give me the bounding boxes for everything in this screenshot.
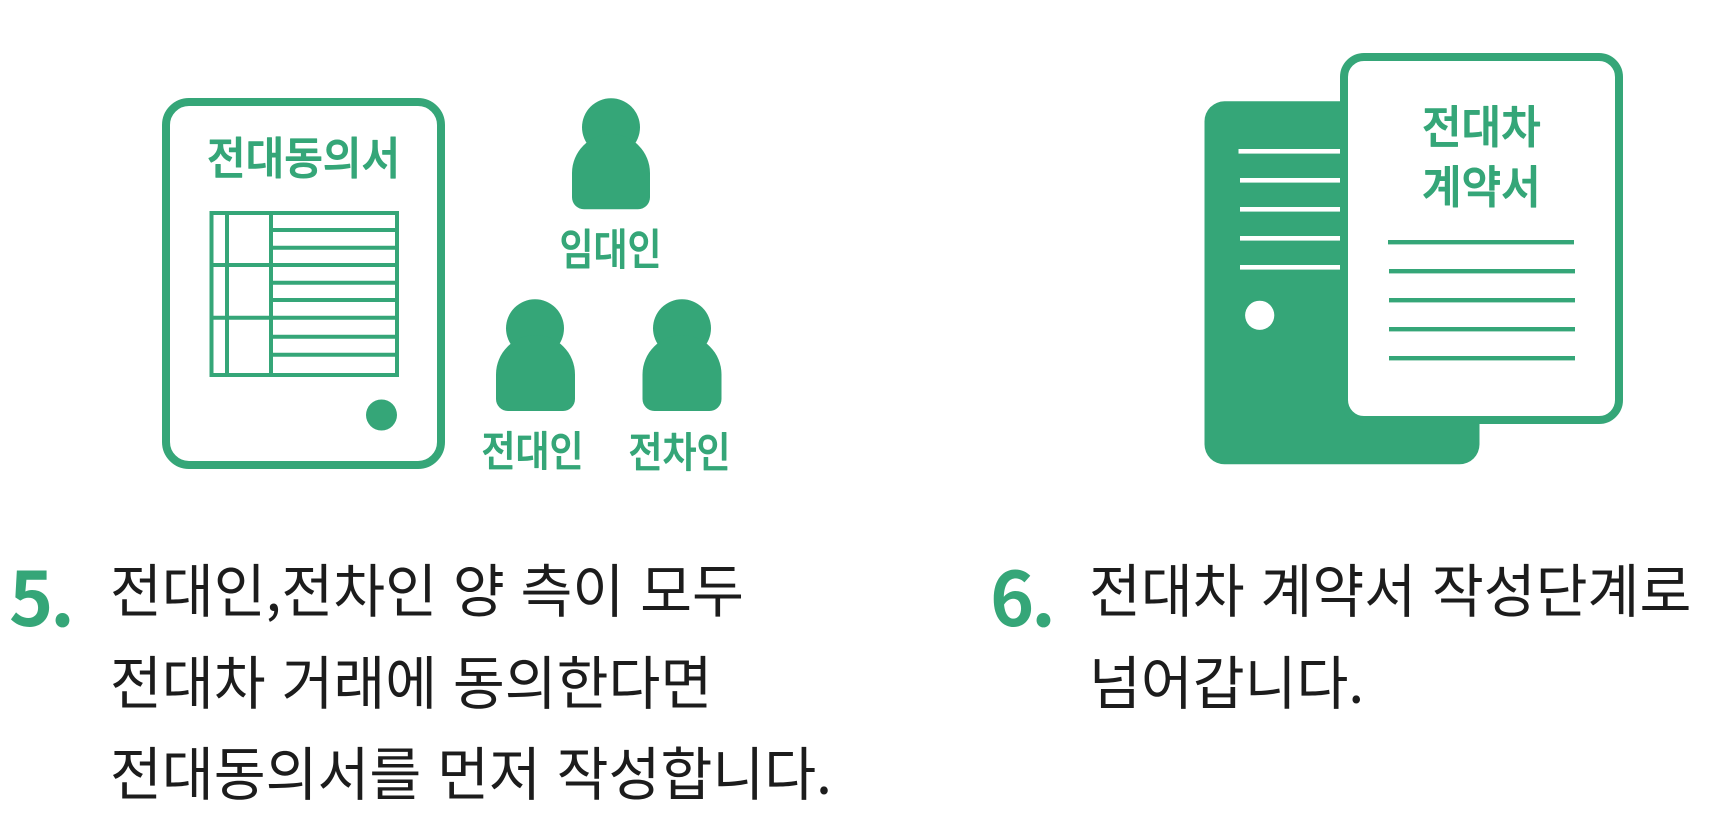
text block: step 5 description: 전대동의서를 먼저 작성합니다.	[110, 729, 832, 812]
panel: step 5 illustration	[166, 98, 731, 480]
heading: sublease: 전대차	[1422, 91, 1541, 156]
heading: contract: 계약서	[1422, 151, 1541, 216]
icon: sublease contract document	[1344, 57, 1619, 420]
step number 5: 5.	[9, 539, 72, 648]
table grid	[212, 213, 397, 375]
label: sublessor: 전대인	[482, 419, 584, 479]
text block: step 5 description: 전대인,전차인 양 측이 모두	[110, 546, 744, 629]
text block: step 5 description	[110, 546, 832, 812]
icon: seal dot	[366, 400, 397, 430]
icon: lessor person	[572, 98, 650, 209]
text block: step 5 description: 전대차 거래에 동의한다면	[110, 638, 712, 721]
icon: consent form tablet	[166, 102, 441, 465]
label: subtenant: 전차인	[628, 420, 731, 480]
text block: step 6 description: 전대차 계약서 작성단계로	[1089, 546, 1691, 629]
text block: step 6 description	[1089, 546, 1691, 721]
label: lessor: 임대인	[560, 216, 662, 278]
icon: sublessor person	[496, 299, 575, 411]
icon: back document	[1204, 101, 1480, 464]
heading: consent form: 전대동의서	[207, 124, 400, 187]
step number 6: 6.	[990, 539, 1053, 648]
icon: subtenant person	[642, 299, 722, 411]
text block: step 6 description: 넘어갑니다.	[1089, 638, 1364, 721]
panel: step 6 illustration	[1204, 57, 1619, 464]
